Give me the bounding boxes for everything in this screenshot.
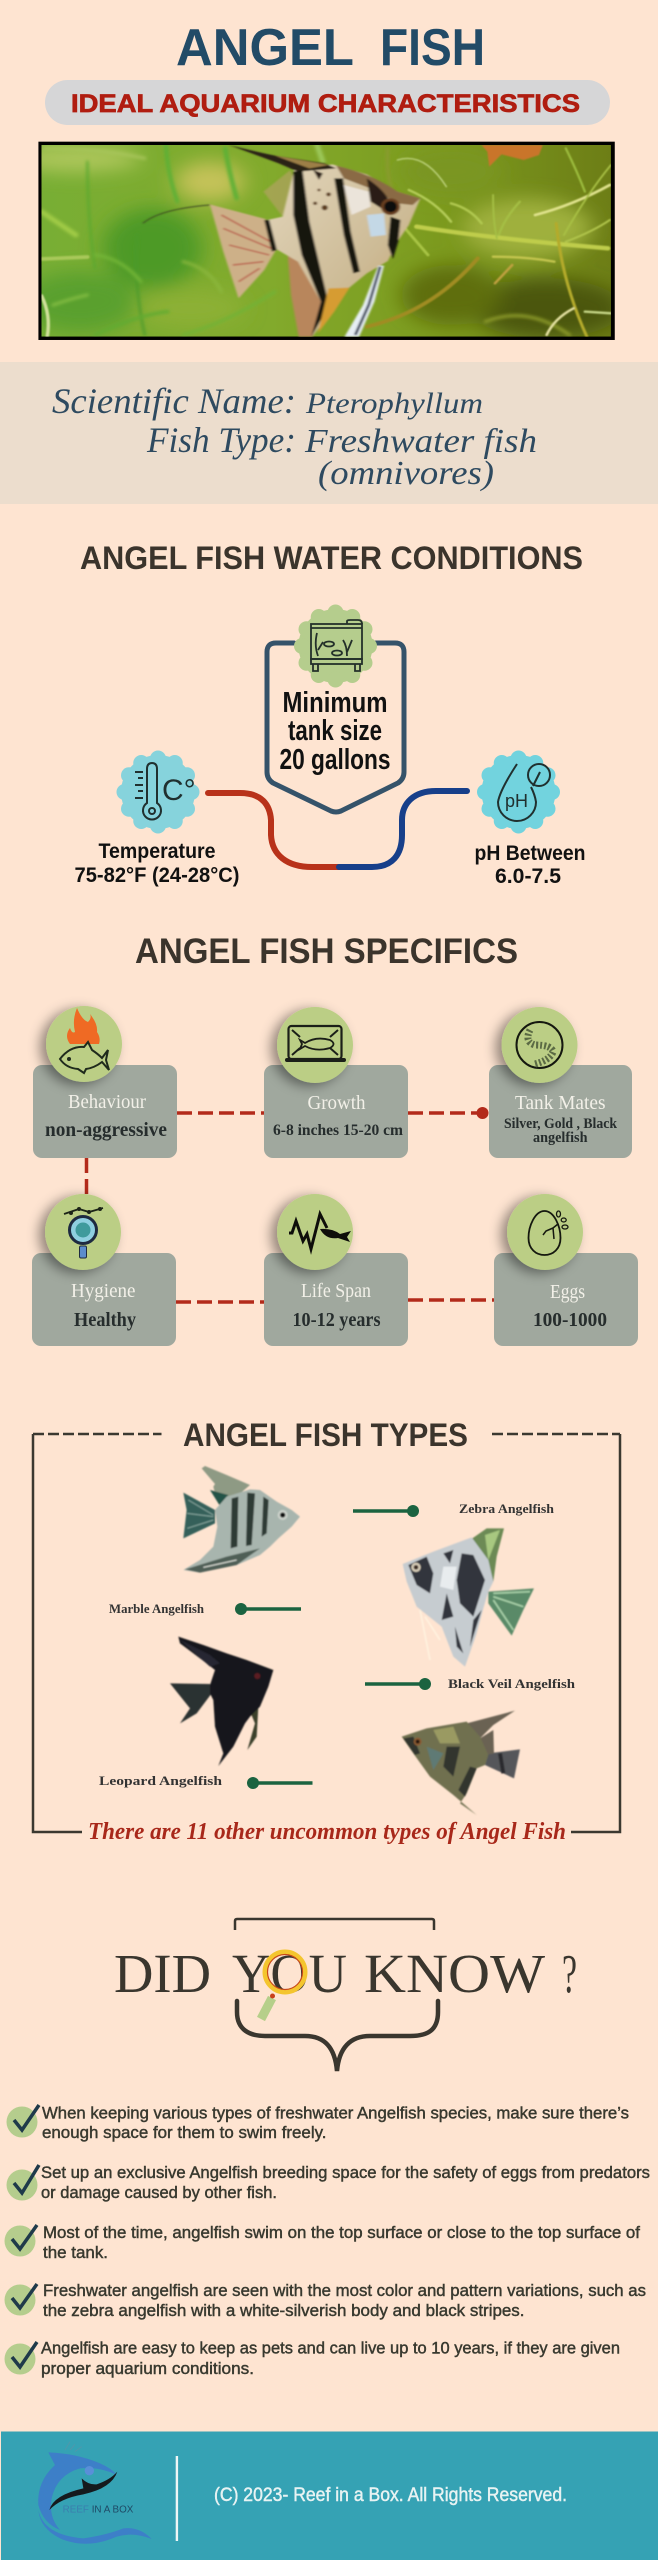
panel: temperature: [74, 750, 240, 887]
icon: thermometer: C°: [162, 774, 196, 807]
card: hygiene: Healthy: [74, 1309, 136, 1331]
panel: minimum tank size: 20 gallons: [280, 744, 390, 776]
info band: scientific name and fish type: Fish Type:: [146, 420, 296, 460]
card: hygiene: Hygiene: [71, 1280, 136, 1302]
card: tank mates: Silver, Gold , Black: [504, 1116, 618, 1132]
label: marble angelfish: Marble Angelfish: [109, 1601, 205, 1616]
icon: check: [6, 2165, 39, 2200]
card: life span: [264, 1194, 408, 1346]
title: FISH: [380, 19, 485, 77]
logo: reef in a box: REEF IN A BOX: [63, 2505, 134, 2516]
panel: pH: [474, 750, 586, 888]
fish illustrations: [170, 1466, 534, 1815]
card: hygiene: [32, 1194, 176, 1346]
info band: scientific name and fish type: (omnivores): [318, 455, 494, 492]
icon: fish shoal in circle: [502, 1007, 578, 1083]
info band: scientific name and fish type: Pterophyllum: [305, 387, 483, 420]
label: black veil angelfish: [365, 1676, 576, 1691]
tip 2: Set up an exclusive Angelfish breeding space for the safety of eggs from predators: [41, 2163, 650, 2182]
dashed connectors: [86, 1107, 494, 1302]
fish: marble: [403, 1528, 534, 1667]
panel: minimum tank size: tank size: [288, 715, 382, 747]
card: tank mates: [489, 1007, 632, 1158]
label: marble angelfish: [109, 1601, 301, 1616]
footer: (C) 2023- Reef in a Box. All Rights Reserved.: [214, 2485, 567, 2506]
subtitle pill: [45, 80, 610, 125]
icon: check: [4, 2225, 37, 2256]
icon: pulse and fish: [277, 1194, 353, 1270]
icon: check: [4, 2342, 37, 2374]
tip 4: [4, 2281, 646, 2320]
tip 1: When keeping various types of freshwater Angelfish species, make sure there’s: [42, 2104, 629, 2122]
tip 4: Freshwater angelfish are seen with the most color and pattern variations, such as: [43, 2281, 646, 2300]
tip 5: [4, 2338, 620, 2378]
card: behaviour: [33, 1006, 177, 1158]
info band: scientific name and fish type: Freshwater fish: [304, 423, 537, 460]
card: growth: 6-8 inches 15-20 cm: [273, 1122, 404, 1139]
heading: did you know: KNOW: [364, 1943, 545, 2004]
card: eggs: [494, 1194, 638, 1346]
hero photo: angel fish among aquatic plants: [11, 142, 623, 340]
label: black veil angelfish: Black Veil Angelfish: [448, 1676, 576, 1691]
fish: black veil: [170, 1637, 273, 1766]
heading: did you know: ?: [562, 1943, 577, 2004]
icon: aquarium tank: [294, 604, 377, 688]
tip 1: enough space for them to swim freely.: [42, 2123, 326, 2142]
card: growth: [264, 1007, 408, 1158]
card: life span: 10-12 years: [292, 1309, 381, 1331]
icon: fish in screen: [277, 1007, 353, 1083]
tip 5: Angelfish are easy to keep as pets and can live up to 10 years, if they are given: [41, 2338, 620, 2358]
card: eggs: 100-1000: [533, 1309, 607, 1331]
tip 3: the tank.: [43, 2243, 108, 2262]
card: tank mates: angelfish: [533, 1130, 588, 1146]
heading: did you know: DID: [114, 1943, 211, 2004]
title: [176, 19, 485, 77]
card: growth: Growth: [308, 1092, 366, 1114]
subtitle pill: IDEAL AQUARIUM CHARACTERISTICS: [71, 90, 580, 118]
icon: magnifier: [45, 1194, 121, 1270]
card: eggs: Eggs: [550, 1281, 585, 1303]
panel: minimum tank size: Minimum: [282, 687, 388, 719]
icon: check: [4, 2284, 37, 2316]
tip 3: Most of the time, angelfish swim on the top surface or close to the top surface of: [43, 2223, 640, 2242]
footer: [1, 2432, 658, 2560]
heading: specifics: ANGEL FISH SPECIFICS: [135, 932, 518, 971]
icon: check: [6, 2105, 39, 2138]
label: leopard angelfish: Leopard Angelfish: [99, 1773, 223, 1788]
info band: scientific name and fish type: Scientific Name:: [52, 381, 296, 421]
icon: magnifying glass: [261, 1952, 305, 2019]
tip 2: [6, 2163, 650, 2202]
logo: reef in a box: [38, 2442, 152, 2544]
heading: did you know: [114, 1919, 577, 2071]
panel: minimum tank size: [267, 604, 404, 812]
title: ANGEL: [176, 19, 354, 77]
icon: flame and fish: [46, 1006, 122, 1082]
panel: pH: 6.0-7.5: [495, 865, 561, 888]
icon: cracked egg: [507, 1194, 583, 1270]
icon: pH drop: pH: [505, 791, 528, 811]
panel: pH: pH Between: [474, 842, 586, 865]
tip 2: or damage caused by other fish.: [41, 2183, 277, 2202]
note: uncommon types: There are 11 other uncommon types of Angel Fish: [88, 1819, 566, 1845]
panel: temperature: 75-82°F (24-28°C): [74, 864, 240, 887]
label: leopard angelfish: [99, 1773, 312, 1789]
heading: types: ANGEL FISH TYPES: [183, 1417, 468, 1453]
card: behaviour: Behaviour: [68, 1091, 146, 1113]
tip 1: [6, 2104, 629, 2142]
icon: thermometer: [116, 750, 200, 834]
label: zebra angelfish: Zebra Angelfish: [459, 1501, 555, 1516]
connector: temperature to pH: [208, 791, 467, 867]
tip 5: proper aquarium conditions.: [41, 2359, 254, 2378]
info band: scientific name and fish type: [0, 362, 658, 504]
card: life span: Life Span: [301, 1280, 371, 1302]
tip 4: the zebra angelfish with a white-silverish body and black stripes.: [43, 2301, 524, 2320]
label: zebra angelfish: [353, 1501, 555, 1517]
card: tank mates: Tank Mates: [515, 1092, 606, 1114]
heading: did you know: YOU: [232, 1943, 347, 2004]
tip 3: [4, 2223, 640, 2262]
heading: water conditions: ANGEL FISH WATER CONDITIONS: [80, 540, 583, 576]
frame: [33, 1434, 620, 1832]
fish: zebra: [183, 1466, 300, 1573]
fish: leopard: [402, 1711, 520, 1815]
panel: temperature: Temperature: [98, 840, 216, 863]
card: behaviour: non-aggressive: [45, 1119, 167, 1141]
panel: angel fish types: [33, 1417, 620, 1845]
